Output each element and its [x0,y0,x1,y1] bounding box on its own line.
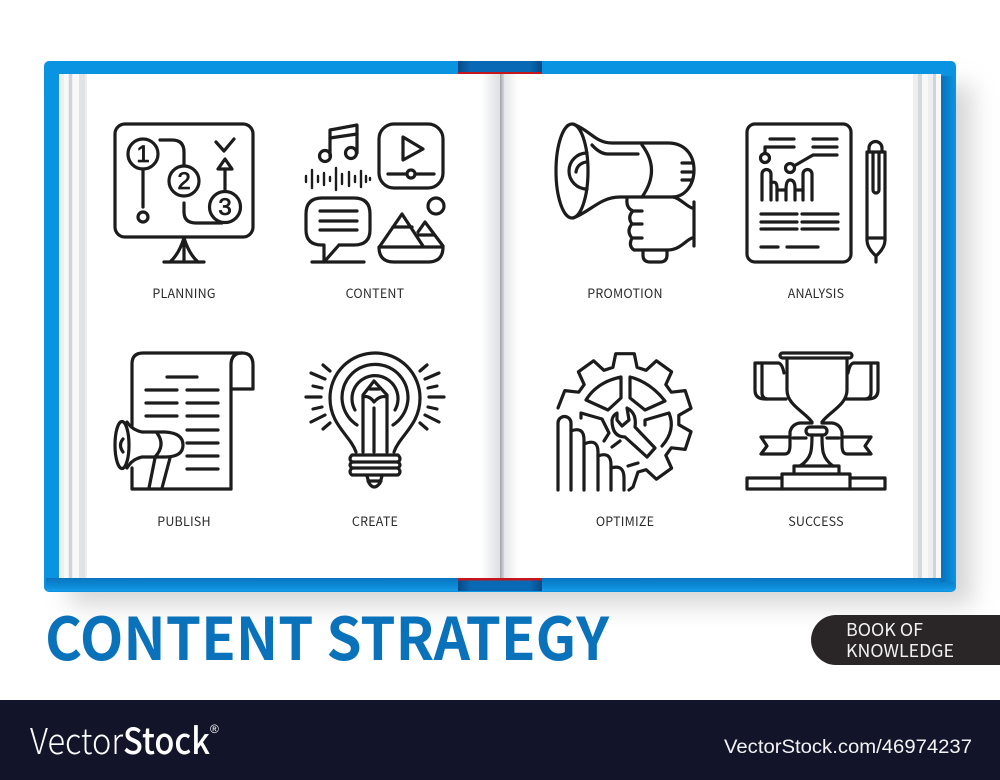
watermark logo: VectorStock [30,713,210,765]
panel: create [306,353,444,530]
footer bar [0,700,1000,780]
book shadow [70,85,972,605]
title: CONTENT STRATEGY [45,592,610,677]
icon: content media [306,124,444,262]
panel: optimize [558,354,691,530]
label: analysis: ANALYSIS [788,283,844,302]
panel: planning [115,124,253,302]
icon: trophy on podium [747,353,885,489]
icon: document with megaphone [115,353,253,489]
label: publish: PUBLISH [157,511,211,530]
icon: report and pen [747,124,885,262]
book spine top and bottom [458,61,542,591]
badge: book of knowledge [811,615,1000,665]
panel: promotion [556,124,694,302]
icon: light bulb with pencil [306,353,444,487]
icon: planning board: 3 [218,194,232,221]
panel: success [747,353,885,530]
label: planning: PLANNING [152,283,216,302]
panel: analysis [747,124,885,302]
label: optimize: OPTIMIZE [596,511,654,530]
label: success: SUCCESS [788,511,844,530]
icon: megaphone in fist [556,124,694,262]
book cover [44,61,956,592]
icon: planning board: 1 [136,141,150,168]
icon: planning board [115,124,253,262]
label: promotion: PROMOTION [587,283,663,302]
image id: VectorStock.com/46974237 [724,736,972,758]
icon: gear with wrench and bars [558,354,691,490]
badge: book of knowledge: KNOWLEDGE [846,637,954,663]
registered mark: ® [210,722,219,736]
panel: content [306,124,444,302]
badge: book of knowledge: BOOK OF [846,616,923,642]
icon: planning board: 2 [177,168,191,195]
open pages [59,74,941,578]
panel: publish [115,353,253,530]
label: create: CREATE [352,511,398,530]
label: content: CONTENT [346,283,405,302]
